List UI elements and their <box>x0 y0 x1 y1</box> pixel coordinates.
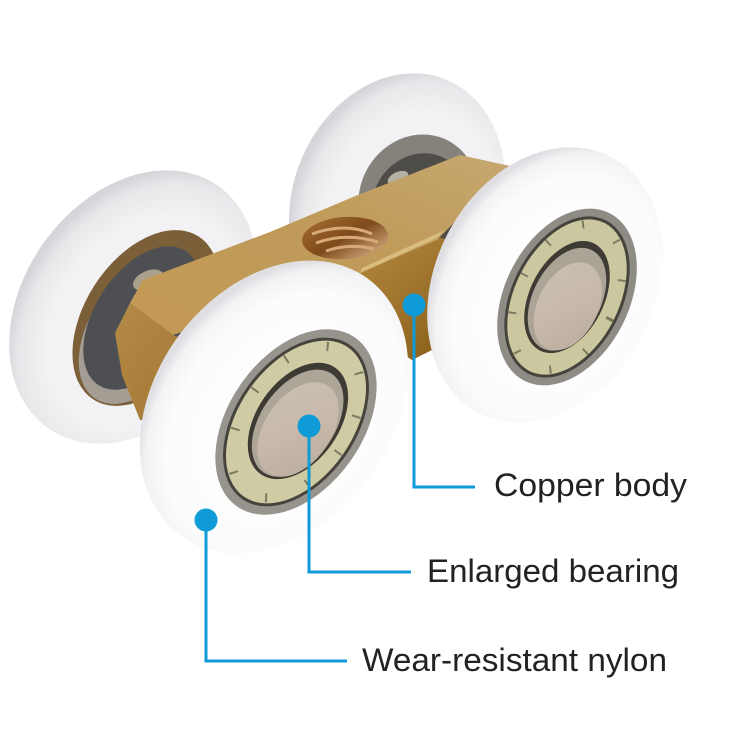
product: roller assembly <box>0 41 708 606</box>
front left wheel <box>84 208 464 606</box>
back top wheel <box>252 41 542 359</box>
body end face <box>115 303 200 420</box>
callout: wear-resistant nylon: Wear-resistant nylon <box>362 642 667 678</box>
body edge highlight <box>360 230 445 273</box>
callout: copper body <box>402 294 687 503</box>
callout: wear-resistant nylon <box>194 508 667 678</box>
threaded hole <box>301 214 389 262</box>
front wheel bearing <box>182 299 410 545</box>
right wheel bearing <box>469 185 665 409</box>
body top face <box>130 155 510 335</box>
body side face <box>360 237 450 360</box>
copper body <box>115 155 510 420</box>
callout: enlarged bearing: Enlarged bearing <box>427 553 679 589</box>
callout: enlarged bearing <box>298 414 679 589</box>
callout: copper body: Copper body <box>494 467 687 503</box>
front right wheel <box>382 107 708 463</box>
back left wheel <box>0 123 308 491</box>
